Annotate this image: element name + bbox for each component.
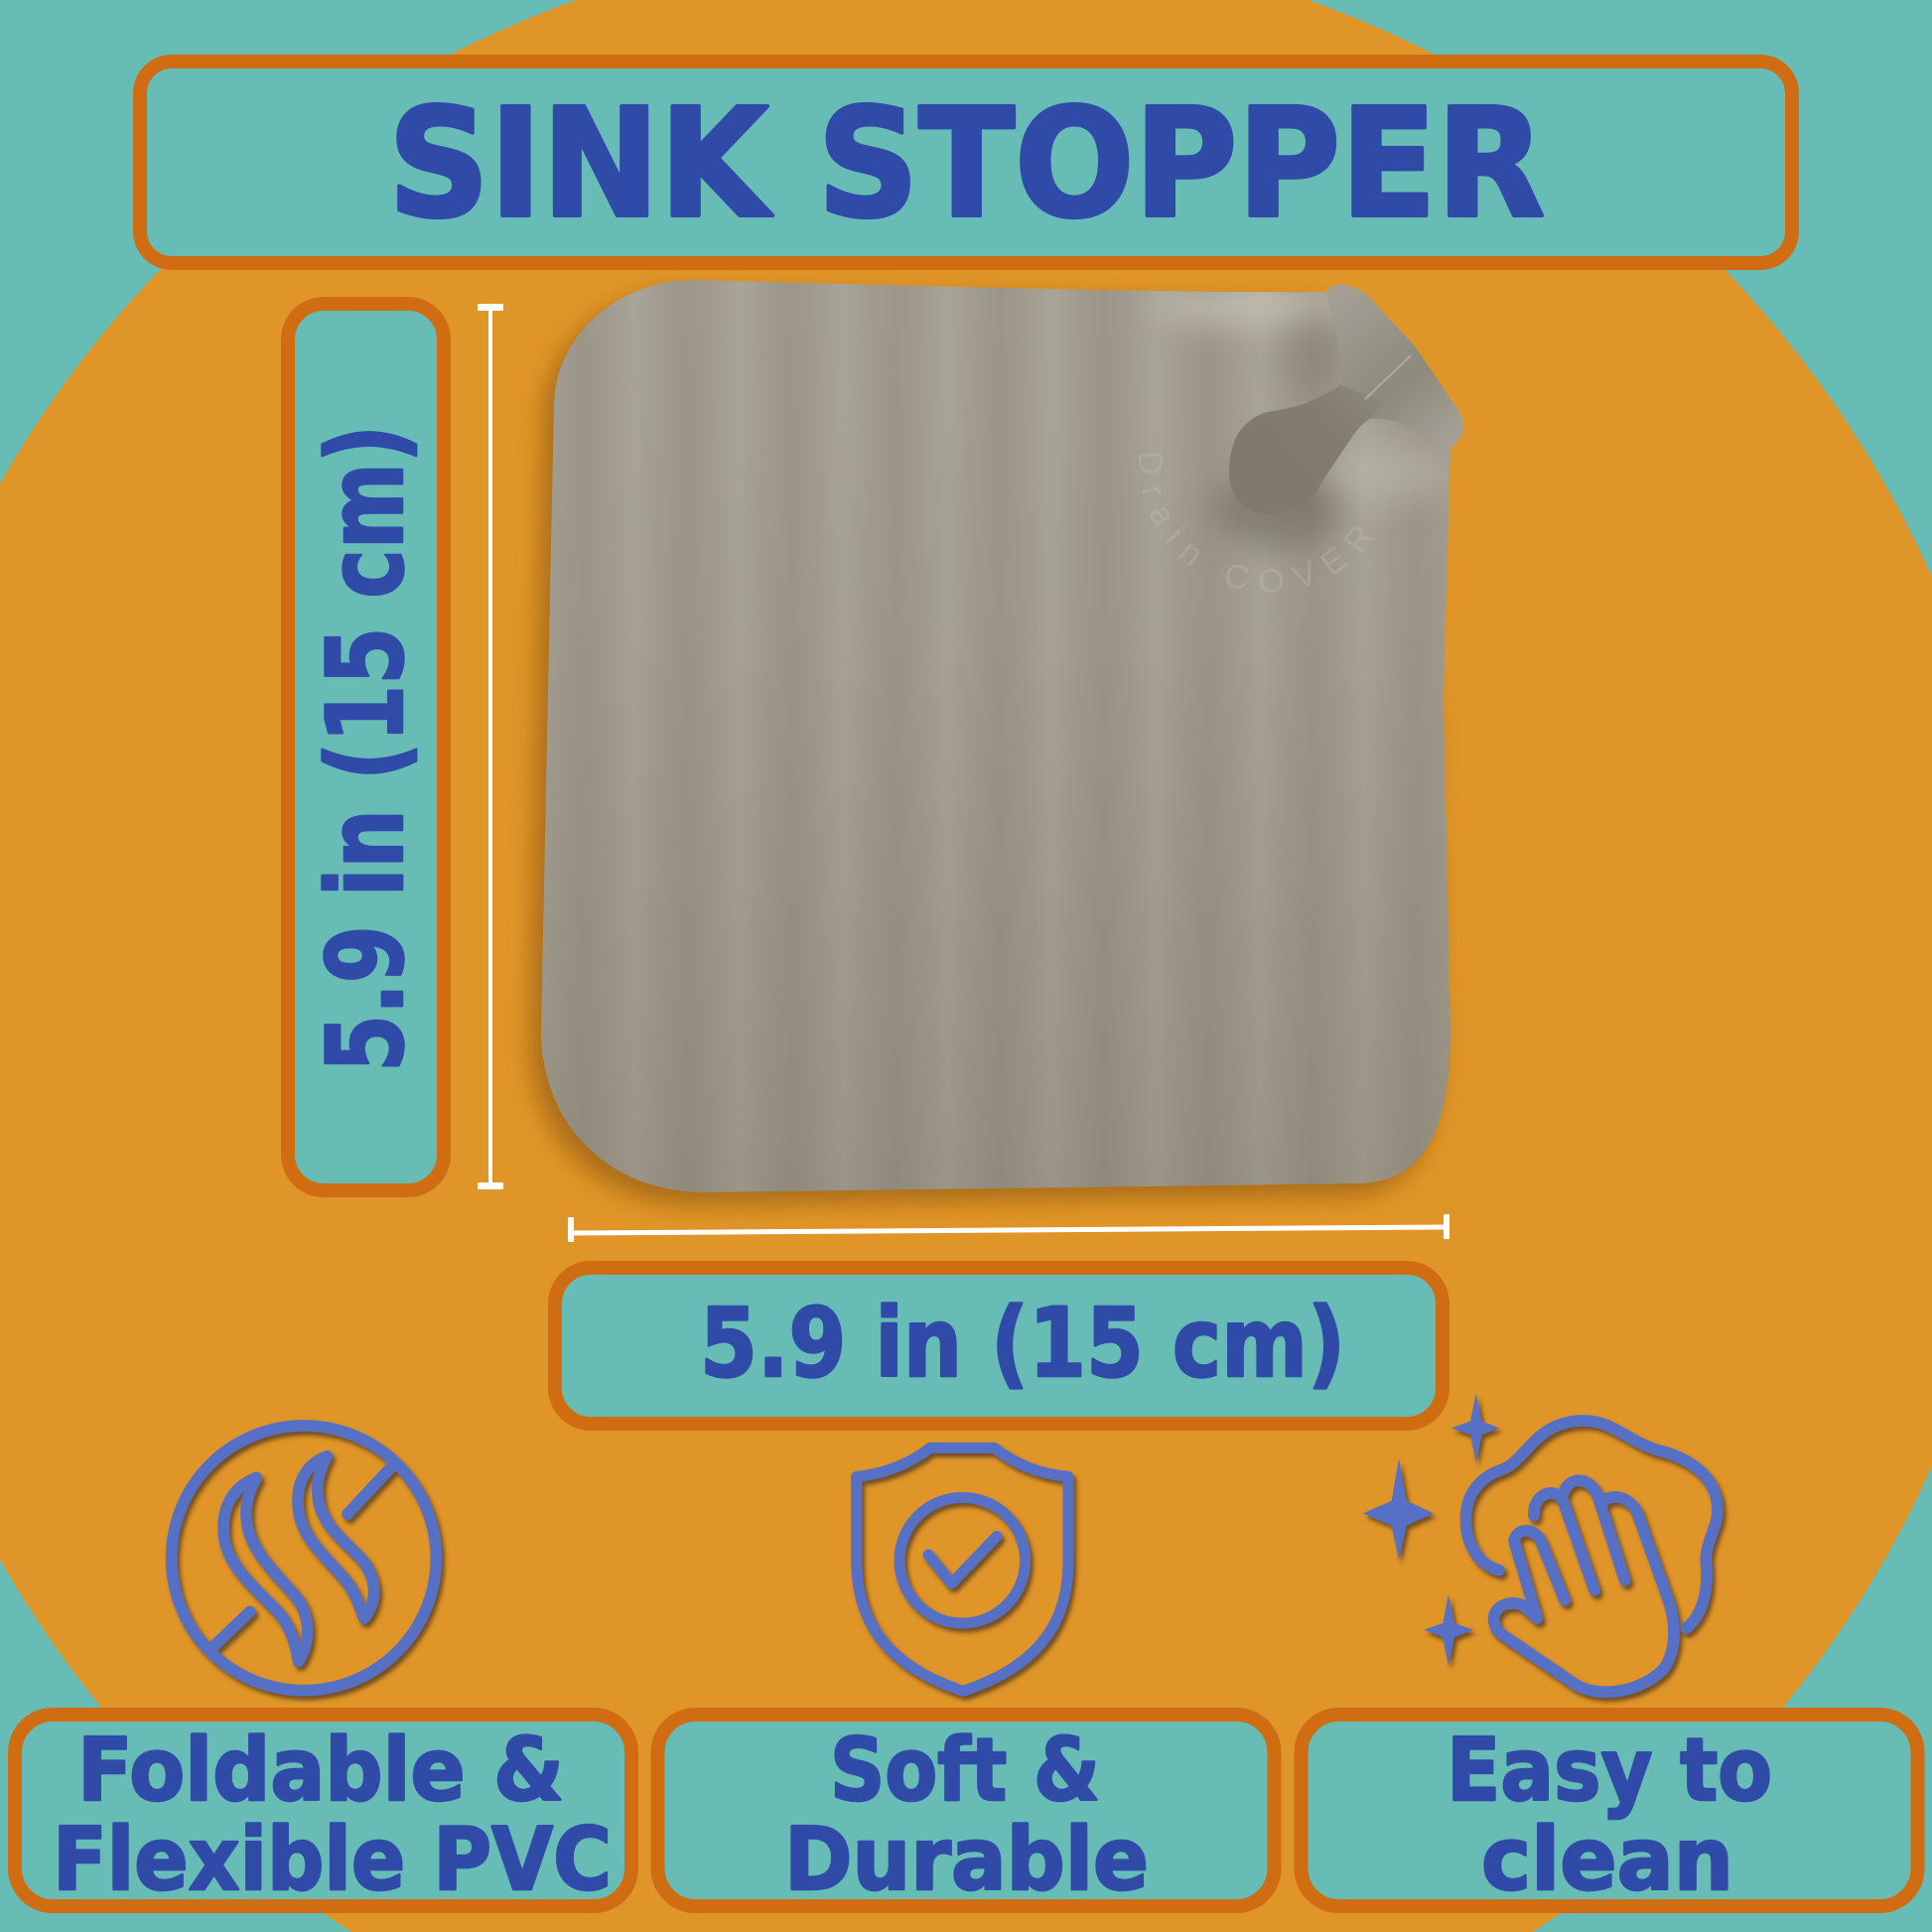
product: silicone sink stopper xyxy=(518,280,1463,1217)
feature box: foldable xyxy=(15,1715,631,1910)
stopper body xyxy=(541,280,1463,1192)
feature box: easy to clean: Easy to xyxy=(1447,1720,1772,1821)
cloth outline xyxy=(1466,1421,1718,1628)
feature box: foldable: Flexible PVC xyxy=(53,1809,612,1910)
horizontal width label xyxy=(555,1268,1443,1424)
vertical height label xyxy=(288,304,444,1190)
stopper drop shadow xyxy=(530,293,1440,1205)
feature box: easy to clean xyxy=(1301,1715,1918,1910)
sparkles xyxy=(1363,1393,1499,1666)
width ruler xyxy=(568,1214,1449,1242)
stopper body: Drain COVER xyxy=(1139,453,1374,593)
feature box: durable: Soft & xyxy=(830,1720,1100,1821)
icon: hand wiping with sparkles xyxy=(1363,1393,1718,1692)
stopper hole xyxy=(1229,385,1370,513)
horizontal width label: 5.9 in (15 cm) xyxy=(700,1288,1345,1399)
title banner: SINK STOPPER xyxy=(388,76,1545,251)
title banner xyxy=(140,62,1792,263)
embossed brand text xyxy=(1139,452,1386,593)
stopper pull tab xyxy=(1325,284,1463,447)
icon: shield with check xyxy=(857,1448,1068,1691)
feature box: foldable: Foldable & xyxy=(77,1720,564,1821)
feature box: durable xyxy=(657,1715,1275,1910)
feature box: easy to clean: clean xyxy=(1481,1809,1733,1910)
icon: no heat / steam crossed out xyxy=(172,1426,436,1691)
height ruler xyxy=(478,304,503,1189)
tab crease xyxy=(1365,355,1411,399)
vertical height label: 5.9 in (15 cm) xyxy=(305,425,427,1072)
hand outline xyxy=(1494,1480,1674,1692)
feature box: durable: Durable xyxy=(784,1809,1149,1910)
